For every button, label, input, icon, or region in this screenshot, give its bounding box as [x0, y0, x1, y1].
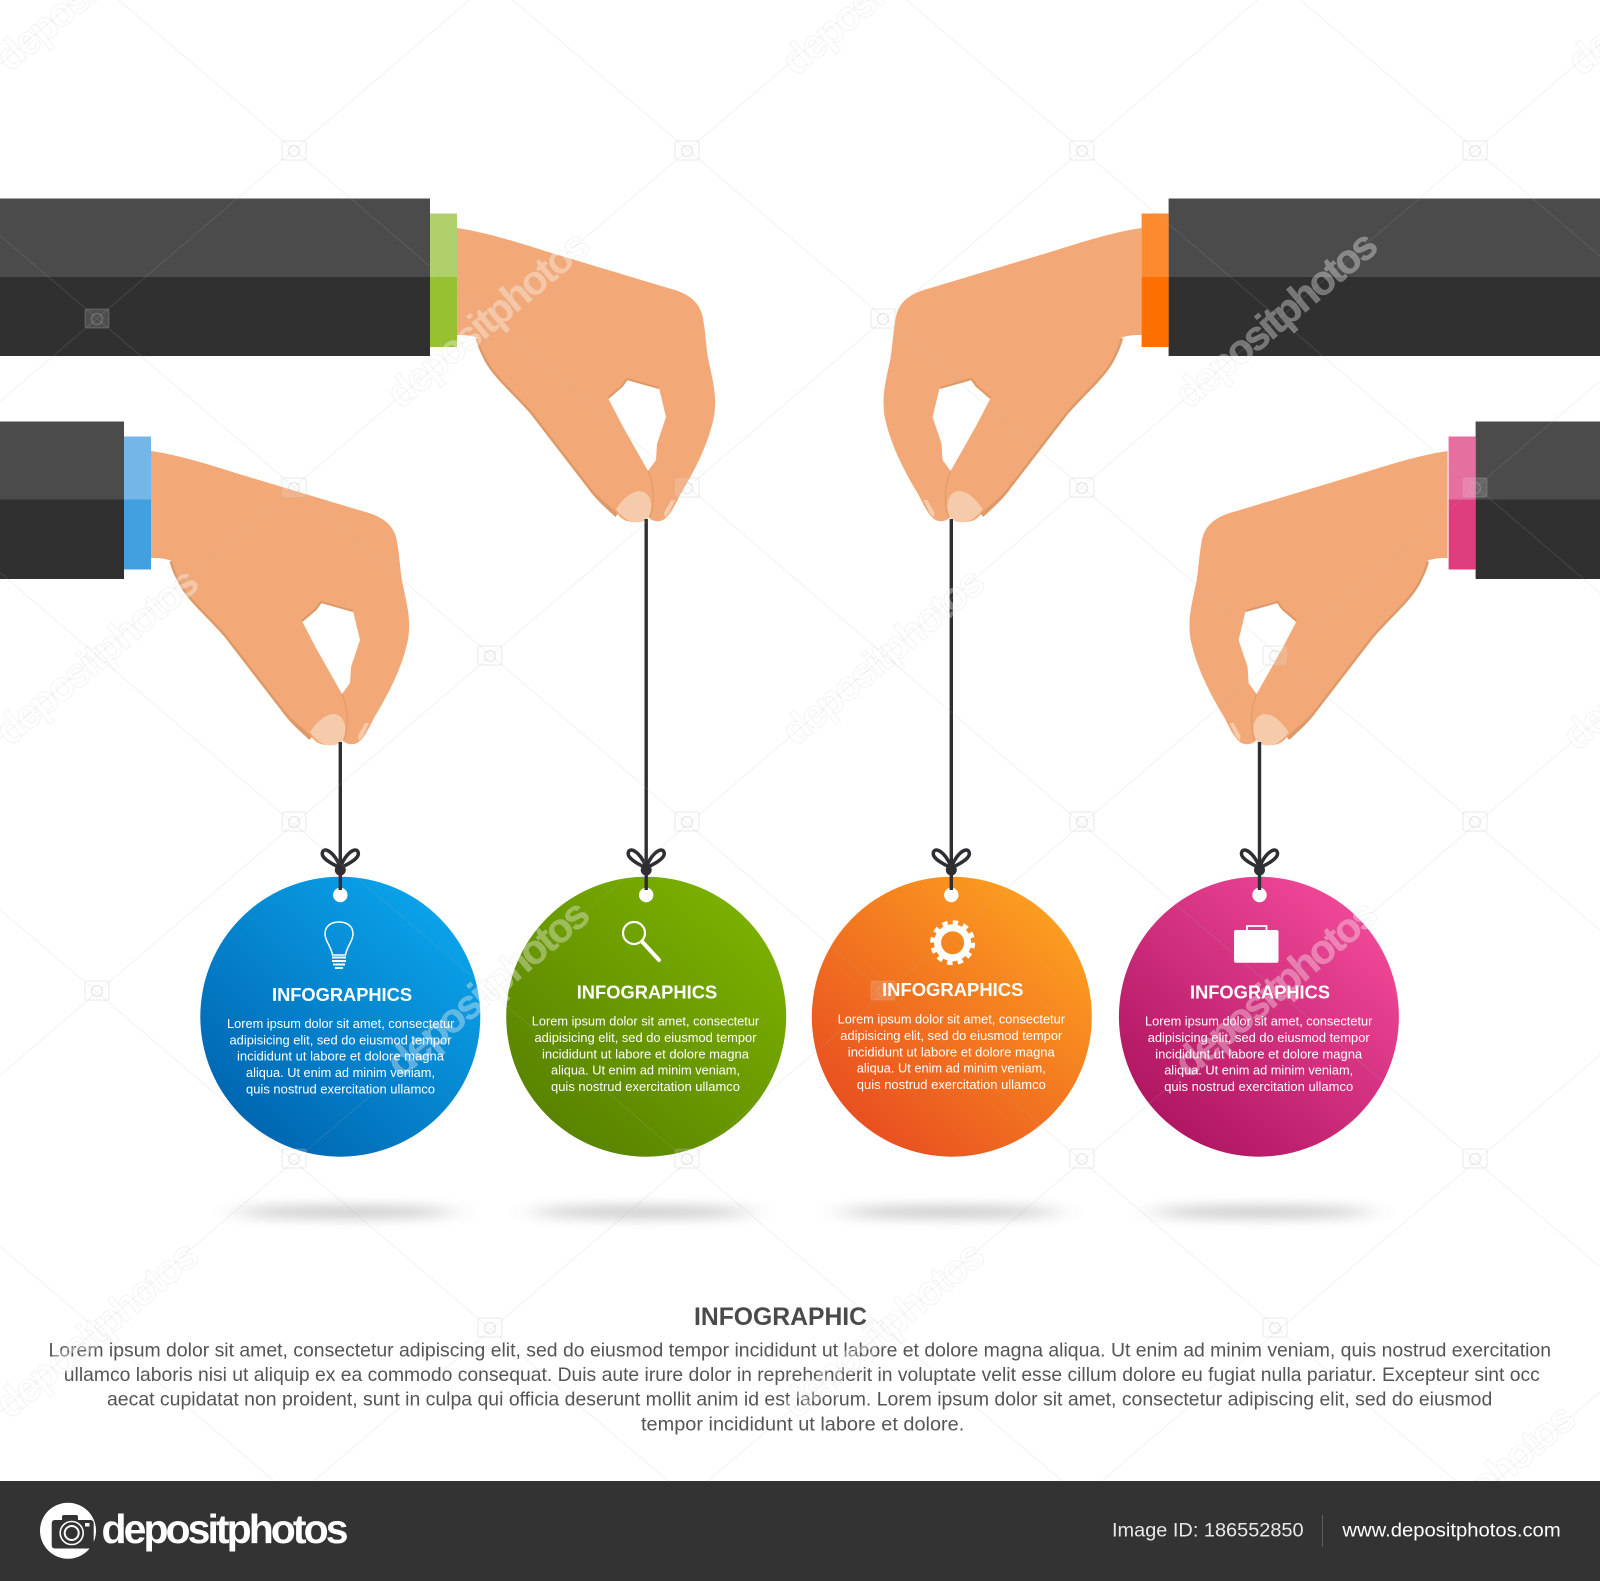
panel: green tag: [506, 519, 786, 1157]
text block: adipisicing elit, sed do eiusmod tempor: [1148, 1030, 1370, 1045]
icon: light bulb: [325, 922, 353, 968]
description paragraph: [48, 1340, 1551, 1435]
icon: magnifying glass: [623, 922, 659, 960]
panel: orange tag: [812, 519, 1092, 1157]
shadow under circle 1: [235, 1206, 455, 1218]
text block: quis nostrud exercitation ullamco: [857, 1077, 1046, 1092]
text block: adipisicing elit, sed do eiusmod tempor: [840, 1028, 1063, 1043]
text block: incididunt ut labore et dolore magna: [542, 1046, 750, 1061]
panel: blue tag: [200, 742, 480, 1157]
description paragraph: Lorem ipsum dolor sit amet, consectetur adipiscing elit, sed do eiusmod tempor incididunt ut labore et dolore magna aliqua. Ut enim ad minim veniam, quis nostrud exercitation: [48, 1340, 1551, 1362]
text block: incididunt ut labore et dolore magna: [237, 1049, 445, 1064]
text block: aliqua. Ut enim ad minim veniam,: [857, 1061, 1046, 1076]
text: depositphotos: [377, 221, 598, 417]
string and bow 2: [628, 519, 664, 890]
image id: Image ID: 186552850: [1112, 1520, 1304, 1542]
text: depositphotos: [1165, 890, 1386, 1086]
text block: [1145, 1014, 1373, 1094]
text: depositphotos: [1165, 221, 1386, 417]
hand 1: green cuff, upper left: [0, 198, 715, 522]
text block: aliqua. Ut enim ad minim veniam,: [551, 1063, 740, 1078]
description paragraph: tempor incididunt ut labore et dolore.: [641, 1413, 964, 1435]
website: www.depositphotos.com: [1341, 1520, 1561, 1542]
text block: incididunt ut labore et dolore magna: [848, 1044, 1056, 1059]
footer bar: [0, 1481, 1600, 1581]
logo wordmark: depositphotos: [102, 1506, 348, 1552]
icon: briefcase: [1234, 926, 1278, 963]
panel: pink tag: [1119, 742, 1399, 1157]
text block: [227, 1016, 455, 1096]
text block: [838, 1012, 1066, 1092]
text block: incididunt ut labore et dolore magna: [1155, 1046, 1363, 1061]
hand 4: pink cuff, lower right: [1189, 422, 1600, 745]
text block: Lorem ipsum dolor sit amet, consectetur: [1145, 1014, 1373, 1029]
text: depositphotos: [772, 558, 993, 754]
string and bow 4: [1241, 742, 1278, 890]
icon: camera logo: [40, 1503, 96, 1559]
text block: Lorem ipsum dolor sit amet, consectetur: [838, 1012, 1066, 1027]
text block: [532, 1014, 760, 1094]
shadow under circle 2: [532, 1206, 752, 1218]
heading: INFOGRAPHICS: [577, 981, 717, 1002]
heading: INFOGRAPHICS: [882, 979, 1023, 1000]
text block: quis nostrud exercitation ullamco: [246, 1081, 435, 1096]
shadow under circle 4: [1152, 1206, 1372, 1218]
description paragraph: ullamco laboris nisi ut aliquip ex ea commodo consequat. Duis aute irure dolor in reprehenderit in voluptate velit esse cillum dolore eu fugiat nulla pariatur. Excepteur sint occ: [64, 1364, 1540, 1386]
heading: INFOGRAPHICS: [1190, 981, 1330, 1002]
text block: Lorem ipsum dolor sit amet, consectetur: [227, 1016, 455, 1031]
main heading: INFOGRAPHIC: [694, 1303, 867, 1331]
hand 3: orange cuff, upper right: [883, 198, 1600, 522]
text block: aliqua. Ut enim ad minim veniam,: [246, 1065, 435, 1080]
hand 2: blue cuff, lower left: [0, 422, 409, 745]
shadow under circle 3: [840, 1206, 1060, 1218]
string and bow 1: [322, 742, 358, 890]
text block: quis nostrud exercitation ullamco: [551, 1079, 740, 1094]
text block: adipisicing elit, sed do eiusmod tempor: [230, 1032, 452, 1047]
text block: adipisicing elit, sed do eiusmod tempor: [534, 1030, 757, 1045]
text block: aliqua. Ut enim ad minim veniam,: [1164, 1063, 1353, 1078]
text: depositphotos: [772, 1231, 993, 1427]
string and bow 3: [933, 519, 969, 890]
heading: INFOGRAPHICS: [272, 984, 412, 1005]
text block: Lorem ipsum dolor sit amet, consectetur: [532, 1014, 760, 1029]
text: depositphotos: [377, 890, 598, 1086]
description paragraph: aecat cupidatat non proident, sunt in culpa qui officia deserunt mollit anim id est laborum. Lorem ipsum dolor sit amet, consectetur adipiscing elit, sed do eiusmod: [107, 1389, 1492, 1411]
icon: gear: [933, 923, 973, 963]
text block: quis nostrud exercitation ullamco: [1164, 1079, 1353, 1094]
